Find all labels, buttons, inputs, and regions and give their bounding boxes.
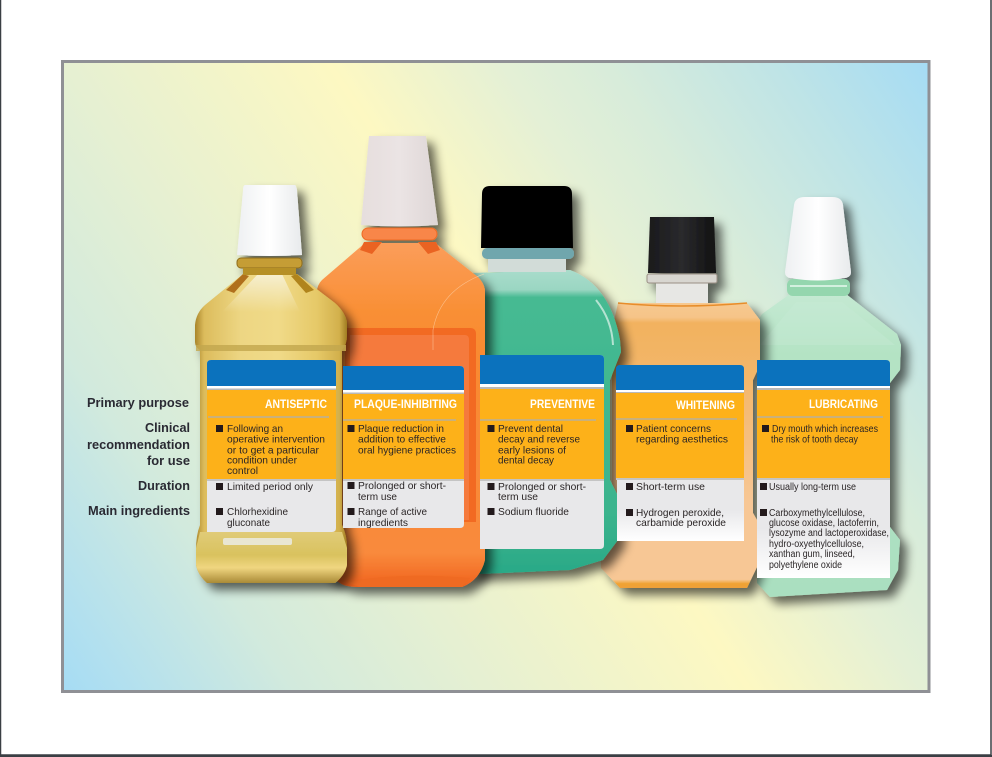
card: antiseptic: Limited period only (227, 481, 314, 493)
card: lubricating: the risk of tooth decay (771, 434, 859, 446)
card: lubricating: glucose oxidase, lactoferrin, (769, 518, 879, 529)
card: plaque-inhibiting: oral hygiene practices (358, 444, 456, 456)
card: preventive: Sodium fluoride (498, 506, 569, 518)
card: antiseptic: Following an (227, 423, 283, 435)
card: whitening: Patient concerns (636, 423, 711, 435)
card: antiseptic (207, 360, 336, 532)
card: whitening: Short-term use (636, 481, 705, 493)
card: plaque-inhibiting: ingredients (358, 517, 408, 529)
label: recommendation: recommendation (87, 437, 190, 452)
card: preventive: Prevent dental (498, 423, 563, 435)
card: antiseptic: or to get a particular (227, 444, 319, 456)
label: for use: for use (147, 453, 190, 468)
label: duration: Duration (138, 478, 190, 493)
card: whitening: carbamide peroxide (636, 517, 726, 529)
card: whitening: WHITENING (676, 400, 735, 412)
bottle: lubricating (757, 197, 901, 597)
card: antiseptic: ANTISEPTIC (265, 399, 327, 411)
card: preventive: dental decay (498, 454, 555, 466)
card: preventive: Prolonged or short- (498, 481, 586, 493)
card: lubricating: xanthan gum, linseed, (769, 549, 855, 560)
card: antiseptic: condition under (227, 454, 297, 466)
card: lubricating (757, 360, 890, 578)
bottle: plaque-inhibiting (317, 136, 485, 587)
card: preventive: early lesions of (498, 444, 566, 456)
bottle: preventive (470, 186, 621, 574)
panel background (62, 62, 929, 692)
card: plaque-inhibiting: Prolonged or short- (358, 480, 446, 492)
row labels (87, 395, 190, 518)
card: antiseptic: gluconate (227, 517, 270, 529)
card: lubricating: polyethylene oxide (769, 560, 842, 571)
card: lubricating: LUBRICATING (809, 399, 878, 411)
bottle: antiseptic (195, 185, 347, 583)
label: main ingredients: Main ingredients (88, 503, 190, 518)
label: clinical: Clinical (145, 420, 190, 435)
card: antiseptic: control (227, 465, 258, 477)
card: lubricating: Dry mouth which increases (772, 423, 878, 435)
card: whitening: regarding aesthetics (636, 434, 728, 446)
card: plaque-inhibiting: Range of active (358, 506, 427, 518)
card: lubricating: Carboxymethylcellulose, (769, 508, 865, 519)
label: primary purpose: Primary purpose (87, 395, 189, 410)
card: plaque-inhibiting (343, 366, 464, 529)
card: whitening: Hydrogen peroxide, (636, 507, 724, 519)
card: lubricating: lysozyme and lactoperoxidase, (769, 528, 889, 539)
card: antiseptic: Chlorhexidine (227, 506, 288, 518)
card: whitening (616, 365, 744, 541)
card: plaque-inhibiting: term use (358, 491, 397, 503)
card: preventive: term use (498, 491, 538, 503)
card: preventive (480, 355, 604, 549)
card: preventive: decay and reverse (498, 434, 580, 446)
card: plaque-inhibiting: Plaque reduction in (358, 423, 444, 435)
card: lubricating: hydro-oxyethylcellulose, (769, 539, 864, 550)
card: plaque-inhibiting: PLAQUE-INHIBITING (354, 399, 457, 411)
card: plaque-inhibiting: addition to effective (358, 434, 446, 446)
card: lubricating: Usually long-term use (769, 481, 856, 493)
bottle: whitening (601, 217, 760, 588)
card: preventive: PREVENTIVE (530, 399, 595, 411)
card: antiseptic: operative intervention (227, 434, 325, 446)
